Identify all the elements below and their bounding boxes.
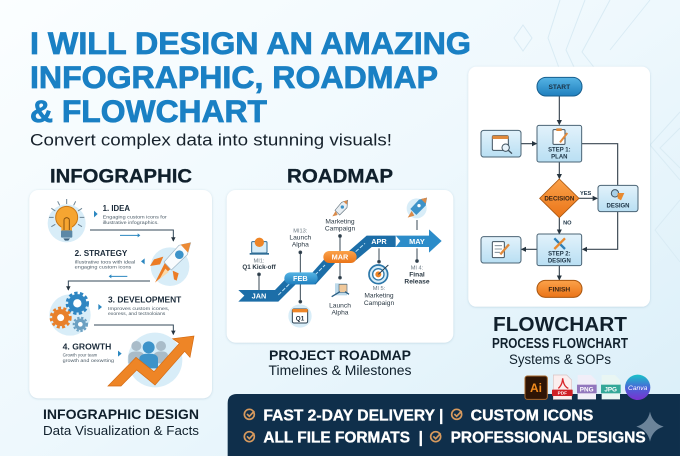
caption: flowchart: Systems & SOPs <box>509 352 611 367</box>
feature text <box>263 407 646 446</box>
timeline ribbon <box>238 229 442 302</box>
icon: png: PNG <box>580 386 594 393</box>
milestone labels: MI1: <box>253 258 265 264</box>
timeline ribbon: APR <box>371 237 387 246</box>
icon: illustrator: Ai <box>530 381 542 395</box>
title: INFOGRAPHIC, ROADMAP <box>30 59 438 95</box>
icon: rocket marketing <box>332 200 348 216</box>
connectors <box>521 96 618 280</box>
no label: NO <box>563 221 572 227</box>
caption: infographic design: INFOGRAPHIC DESIGN <box>43 406 199 422</box>
feature text: | <box>439 407 443 424</box>
step 2 text: 2. STRATEGY <box>75 249 128 258</box>
milestone labels: MI 4: <box>411 265 424 271</box>
step 4 text: growth and oexwrting <box>63 358 114 364</box>
step 3 text <box>98 296 181 317</box>
step 3 text: 3. DEVELOPMENT <box>108 296 181 305</box>
feature text: CUSTOM ICONS <box>471 407 593 424</box>
icon: rocket <box>150 243 191 286</box>
step 4 text <box>63 342 122 364</box>
icon: canva: Canva <box>628 385 648 392</box>
caption: project roadmap: PROJECT ROADMAP <box>269 347 411 363</box>
document box <box>481 237 521 263</box>
icon: pdf: PDF <box>558 391 567 396</box>
panel: roadmap <box>227 190 453 343</box>
milestone labels: Campaign <box>364 300 394 307</box>
icon: q1 calendar <box>288 304 312 328</box>
step 1 box: PLAN <box>551 154 567 160</box>
month pill: mar <box>323 251 357 263</box>
step 2 box: DESIGN <box>548 258 571 264</box>
caption: flowchart: PROCESS FLOWCHART <box>492 336 628 352</box>
icon: target <box>369 265 388 284</box>
icon: jpg: JPG <box>604 386 617 393</box>
design box <box>598 185 638 212</box>
finish node <box>537 280 582 297</box>
step 1 box: STEP 1: <box>548 148 571 154</box>
milestone labels: Alpha <box>292 242 309 249</box>
icon: launch alpha <box>332 283 349 297</box>
icon: rocket final release <box>407 198 427 218</box>
step 1 box <box>537 125 582 162</box>
decision diamond <box>540 179 579 218</box>
design box: DESIGN <box>607 204 629 210</box>
milestone labels: Q1 Kick-off <box>242 264 276 271</box>
heading: infographic: INFOGRAPHIC <box>50 166 192 188</box>
milestone labels: Campaign <box>325 226 355 233</box>
arrow: idea to strategy <box>90 230 173 241</box>
title: & FLOWCHART <box>30 93 267 129</box>
decision diamond: DECISION <box>544 197 574 203</box>
caption: project roadmap <box>268 347 412 378</box>
feature text: ALL FILE FORMATS <box>263 429 410 446</box>
milestone labels: MI 5: <box>373 286 386 292</box>
milestone labels: Marketing <box>325 218 355 225</box>
timeline ribbon: MAY <box>409 237 425 246</box>
feature banner <box>228 375 680 456</box>
start node: START <box>548 84 570 91</box>
step 1 text: Engaging custom icons for <box>103 214 167 220</box>
title <box>30 25 471 129</box>
step 4 text: Growth your team <box>63 353 97 359</box>
step 4 text: 4. GROWTH <box>63 342 112 351</box>
step 3 text: exoress, and tectnoloians <box>108 311 166 317</box>
stems <box>258 220 418 303</box>
step 1 text: illustrative infographics. <box>103 220 159 226</box>
milestone labels: Launch <box>289 235 312 242</box>
icon: light bulb <box>48 199 86 242</box>
caption: infographic design: Data Visualization & Facts <box>43 423 200 438</box>
milestone labels: Release <box>404 278 430 285</box>
icon: laptop kick-off <box>250 238 269 255</box>
subtitle: Convert complex data into stunning visuals! <box>30 132 392 150</box>
timeline ribbon: JAN <box>252 291 266 300</box>
milestone labels: Launch <box>329 302 351 309</box>
icon: team and growth arrow <box>108 333 194 387</box>
title: I WILL DESIGN AN AMAZING <box>30 25 471 61</box>
caption: project roadmap: Timelines & Milestones <box>268 363 412 378</box>
caption: infographic design <box>43 406 200 438</box>
feature text: FAST 2-DAY DELIVERY <box>263 407 435 424</box>
step 2 text <box>75 249 145 271</box>
feature text: PROFESSIONAL DESIGNS <box>451 429 646 446</box>
icon: gears <box>49 293 91 336</box>
step 1 text <box>94 204 167 226</box>
icon: canva <box>625 375 650 400</box>
milestone labels: MI13: <box>293 228 308 234</box>
start node <box>537 77 582 96</box>
caption: flowchart: FLOWCHART <box>493 314 627 336</box>
icon: q1 calendar: Q1 <box>296 315 305 322</box>
month pill: feb <box>284 272 318 284</box>
yes label: YES <box>580 191 592 197</box>
finish node: FINISH <box>548 286 570 293</box>
check icons <box>244 409 462 442</box>
arrow: development to growth <box>94 325 173 334</box>
feature text: | <box>419 429 423 446</box>
step 2 text: Illustrative toos with ideal <box>75 259 135 265</box>
icon: illustrator <box>525 376 547 399</box>
step 2 box: STEP 2: <box>548 252 571 258</box>
sparkle <box>636 412 664 442</box>
panel: flowchart <box>468 67 650 307</box>
milestone labels: Marketing <box>364 293 394 300</box>
milestone labels <box>242 218 430 316</box>
month pill: feb: FEB <box>293 274 308 283</box>
step 2 box <box>537 234 582 266</box>
panel: infographic <box>29 190 212 398</box>
heading: roadmap: ROADMAP <box>287 166 393 188</box>
milestone labels: Alpha <box>331 309 349 316</box>
calendar search box <box>481 130 521 157</box>
caption: flowchart <box>492 314 628 367</box>
step 3 text: Improves custom icones, <box>108 306 169 312</box>
step 2 text: engaging custom icons <box>75 265 132 271</box>
icon: jpg <box>601 375 621 399</box>
step 1 text: 1. IDEA <box>103 204 130 213</box>
month pill: mar: MAR <box>332 253 349 262</box>
icon: pdf <box>552 375 573 399</box>
icon: png <box>577 375 597 399</box>
milestone labels: Final <box>409 272 425 279</box>
arrow: strategy to development <box>68 274 150 290</box>
